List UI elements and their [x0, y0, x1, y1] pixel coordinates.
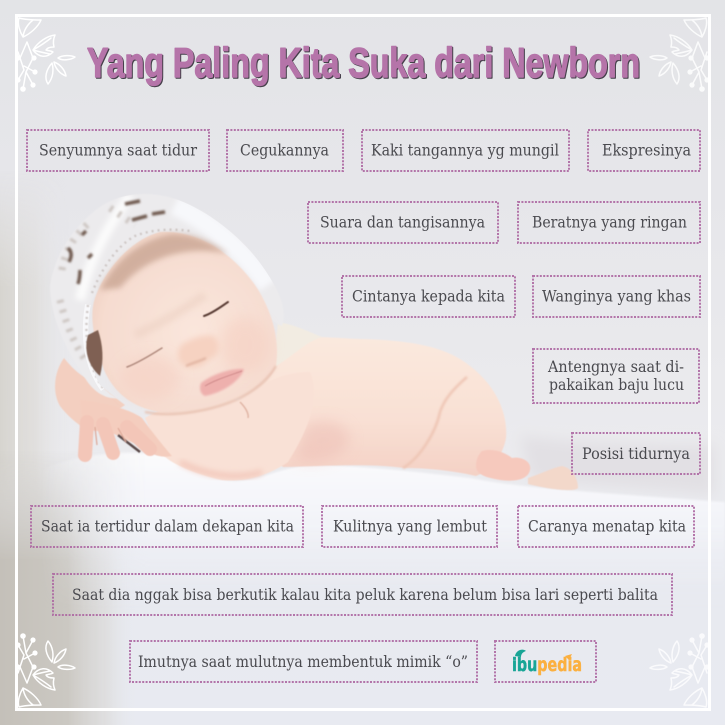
- baby bonnet: [50, 194, 284, 398]
- baby far arm: [55, 358, 125, 430]
- label: Antengnya saat dipakaikan baju lucu: pakaikan baju lucu: [549, 375, 684, 394]
- label: Antengnya saat dipakaikan baju lucu: Antengnya saat di-: [547, 357, 684, 376]
- baby cheeks and shading: [120, 356, 180, 400]
- label: Kaki tangannya yg mungil: [362, 130, 569, 171]
- label: Beratnya yang ringan: [518, 202, 700, 243]
- blanket: [63, 453, 724, 562]
- label: Imutnya saat mulutnya membentuk mimik o: Imutnya saat mulutnya membentuk mimik “o”: [138, 652, 468, 671]
- label: Posisi tidurnya: [572, 433, 700, 474]
- label: Imutnya saat mulutnya membentuk mimik o: [130, 641, 477, 682]
- label: Saat ia tertidur dalam dekapan kita: Saat ia tertidur dalam dekapan kita: [41, 516, 294, 536]
- baby head: [92, 232, 277, 413]
- label: Kulitnya yang lembut: [322, 506, 497, 547]
- label: Ekspresinya: [588, 130, 700, 171]
- floral corner: top left: [15, 18, 75, 92]
- baby nose: [178, 335, 219, 368]
- label: Suara dan tangisannya: [308, 202, 498, 243]
- baby chin crease: [145, 366, 276, 414]
- baby hand: [80, 400, 172, 457]
- label: Senyumnya saat tidur: Senyumnya saat tidur: [39, 140, 197, 160]
- logo mother figure: [515, 650, 526, 657]
- floral corner: bottom left: [15, 633, 75, 707]
- floral corner: top right: [650, 18, 710, 92]
- label: Kaki tangannya yg mungil: Kaki tangannya yg mungil: [371, 140, 559, 160]
- baby hair: [86, 330, 102, 376]
- label: Cegukannya: Cegukannya: [240, 140, 329, 160]
- label: Suara dan tangisannya: Suara dan tangisannya: [320, 212, 485, 232]
- logo box: ibupedia: [495, 641, 596, 682]
- label: Cintanya kepada kita: Cintanya kepada kita: [352, 286, 505, 306]
- label: Posisi tidurnya: Posisi tidurnya: [582, 444, 690, 463]
- label: Wanginya yang khas: Wanginya yang khas: [542, 286, 691, 306]
- label: Kulitnya yang lembut: Kulitnya yang lembut: [333, 516, 488, 536]
- logo wordmark: ibupedia: [512, 654, 582, 676]
- baby neck wrap: [273, 322, 322, 368]
- photo: sleeping baby: [50, 194, 578, 490]
- baby body and legs: [230, 337, 506, 476]
- label: Senyumnya saat tidur: [27, 130, 209, 171]
- floral corner: bottom right: [650, 633, 710, 707]
- label: Caranya menatap kita: Caranya menatap kita: [528, 516, 686, 536]
- baby feet: [476, 450, 578, 490]
- baby mouth: [200, 369, 244, 396]
- logo heart accent: [565, 654, 572, 660]
- label: Cegukannya: [227, 130, 343, 171]
- baby near arm: [145, 372, 314, 480]
- photo background: [0, 204, 109, 725]
- label: Beratnya yang ringan: Beratnya yang ringan: [532, 212, 687, 232]
- label: Ekspresinya: Ekspresinya: [602, 140, 691, 160]
- label: Saat dia nggak bisa berkutik: [53, 574, 672, 615]
- label: Caranya menatap kita: [518, 506, 694, 547]
- label: Cintanya kepada kita: [342, 276, 515, 317]
- label: Antengnya saat dipakaikan baju lucu: [533, 349, 699, 403]
- label: Saat dia nggak bisa berkutik: Saat dia nggak bisa berkutik kalau kita peluk karena belum bisa lari seperti balita: [72, 585, 658, 604]
- baby eyes: [204, 302, 228, 316]
- label: Saat ia tertidur dalam dekapan kita: [31, 506, 303, 547]
- label: Wanginya yang khas: [533, 276, 700, 317]
